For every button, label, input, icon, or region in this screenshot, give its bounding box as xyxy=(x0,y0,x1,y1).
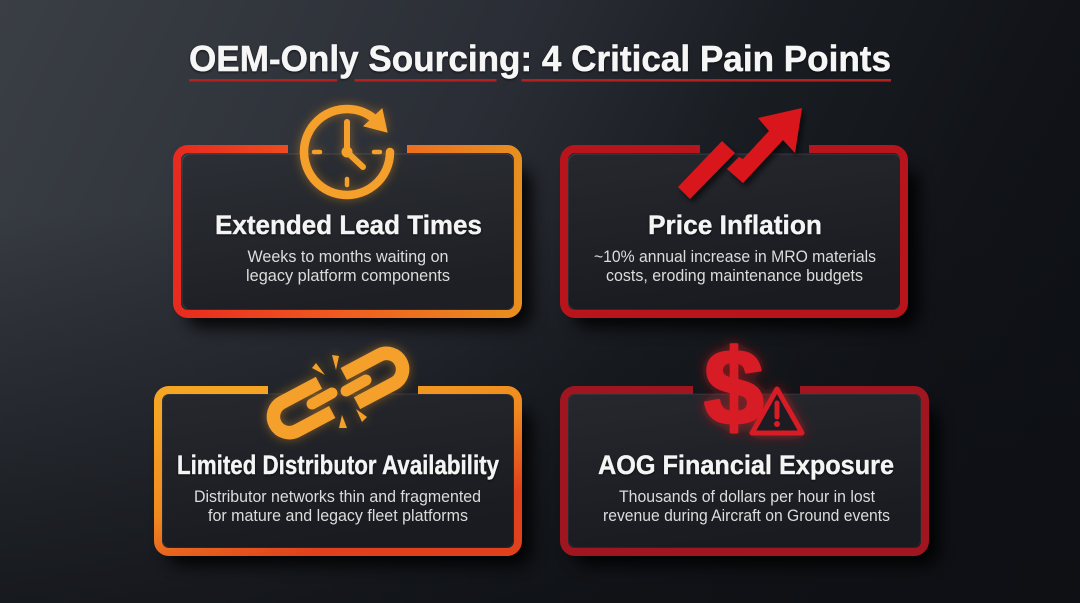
panel: price inflation xyxy=(564,108,919,328)
description: price inflation: costs, eroding maintenance budgets xyxy=(606,267,863,285)
panel 2 card fill xyxy=(568,154,901,310)
icon: dollar sign with warning xyxy=(704,327,802,447)
heading: extended lead times: Extended Lead Times xyxy=(215,210,482,240)
heading: AOG financial exposure: AOG Financial Exposure xyxy=(598,450,894,480)
panel 4 card fill xyxy=(568,394,921,548)
icon: rising arrow xyxy=(678,108,802,199)
icon: broken chain link xyxy=(268,348,408,438)
warning triangle xyxy=(752,389,802,433)
description: price inflation: ~10% annual increase in MRO materials xyxy=(594,248,876,266)
description: AOG financial exposure: revenue during Aircraft on Ground events xyxy=(603,507,890,525)
description: extended lead times: legacy platform components xyxy=(246,267,450,285)
panel 1 border xyxy=(177,149,518,314)
panel 1 card fill xyxy=(182,154,514,310)
panel 4 border xyxy=(564,390,925,552)
panel 3 border xyxy=(158,390,518,552)
heading: limited distributor availability: Limited Distributor Availability xyxy=(177,450,499,480)
panel: limited distributor availability xyxy=(158,348,532,566)
description: price inflation xyxy=(594,248,876,285)
description: AOG financial exposure: Thousands of dollars per hour in lost xyxy=(619,488,875,506)
panel 2 border xyxy=(564,149,904,314)
panel: extended lead times xyxy=(177,109,532,328)
panel: AOG financial exposure xyxy=(564,327,939,566)
heading: price inflation: Price Inflation xyxy=(648,210,822,240)
dollar sign: $ xyxy=(704,327,764,447)
description: limited distributor availability: for mature and legacy fleet platforms xyxy=(208,507,468,525)
title: OEM-Only Sourcing: 4 Critical Pain Points xyxy=(189,38,891,79)
description: extended lead times: Weeks to months waiting on xyxy=(248,248,448,266)
panel 3 card fill xyxy=(162,394,514,548)
description: limited distributor availability xyxy=(194,488,481,525)
description: limited distributor availability: Distributor networks thin and fragmented xyxy=(194,488,481,506)
description: AOG financial exposure xyxy=(603,488,890,525)
icon: clock with arrow xyxy=(304,109,390,195)
description: extended lead times xyxy=(246,248,450,285)
